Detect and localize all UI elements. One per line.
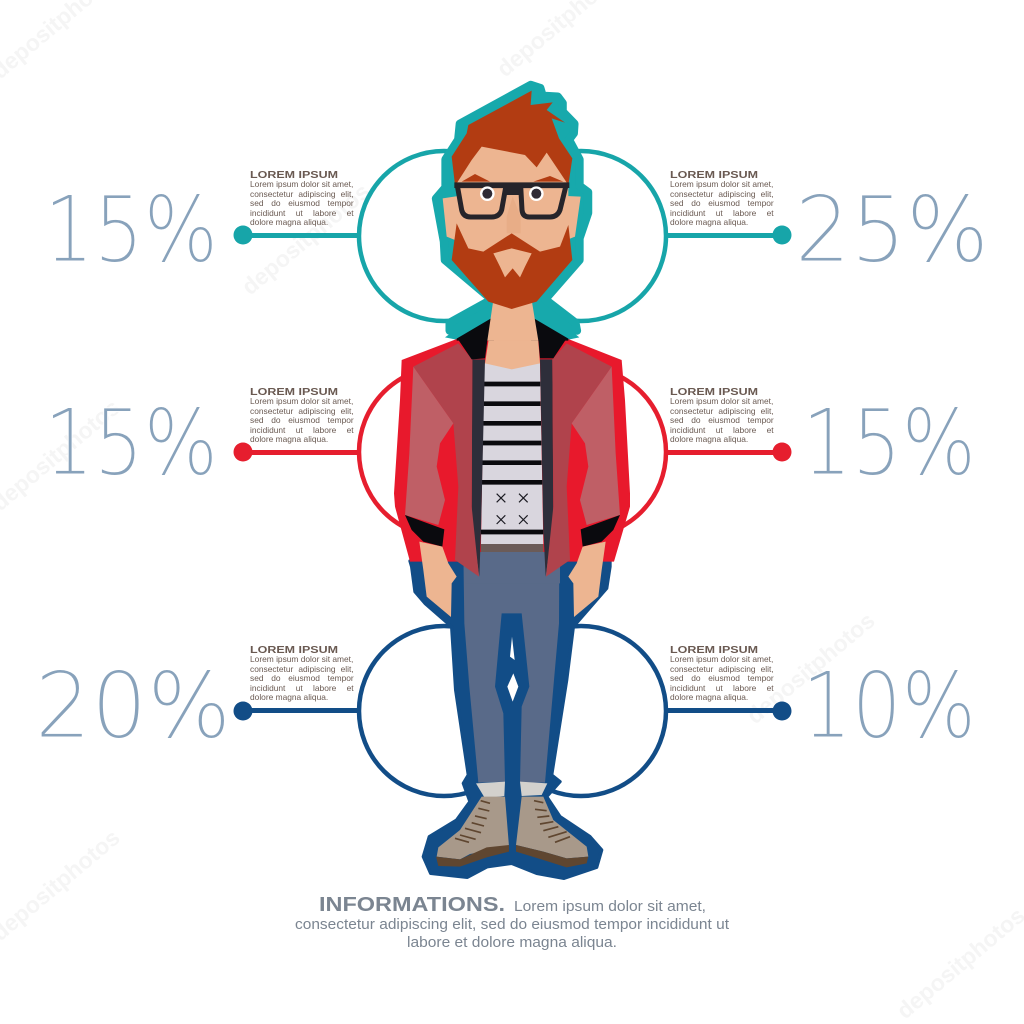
bottom information text: Lorem ipsum dolor sit amet,	[514, 899, 706, 915]
text block: bottom right: incididunt ut labore et	[670, 683, 774, 693]
text block: top right: dolore magna aliqua.	[670, 217, 748, 227]
connector: middle right	[666, 442, 792, 462]
percentage: 25% top right: 25%	[795, 178, 989, 283]
text block: top right: incididunt ut labore et	[670, 208, 774, 218]
text block: bottom left: sed do eiusmod tempor	[250, 673, 354, 683]
text block: top left	[250, 170, 354, 227]
text block: bottom right: dolore magna aliqua.	[670, 692, 748, 702]
text block: middle left: dolore magna aliqua.	[250, 434, 328, 444]
connector: bottom left	[234, 702, 359, 720]
text block: top left: consectetur adipiscing elit,	[250, 189, 354, 199]
percentage: 15% top left: 15%	[44, 178, 218, 283]
text block: middle right: incididunt ut labore et	[670, 425, 774, 435]
text block: middle left: LOREM IPSUM	[250, 387, 338, 398]
text block: middle right: sed do eiusmod tempor	[670, 415, 774, 425]
text block: bottom left: dolore magna aliqua.	[250, 692, 328, 702]
percentage: 15% middle left: 15%	[44, 391, 218, 496]
text block: middle right	[670, 387, 774, 444]
text block: middle right: consectetur adipiscing elit,	[670, 406, 774, 416]
text block: bottom left: LOREM IPSUM	[250, 645, 338, 656]
text block: top right	[670, 170, 774, 227]
text block: top left: sed do eiusmod tempor	[250, 198, 354, 208]
connector: top left	[234, 226, 359, 244]
text block: top left: Lorem ipsum dolor sit amet,	[250, 179, 353, 189]
text: depositphotos	[742, 607, 880, 729]
legs: blue outline and trousers	[410, 550, 610, 878]
red ring pair	[359, 367, 666, 537]
text block: bottom left: Lorem ipsum dolor sit amet,	[250, 654, 353, 664]
connector: middle left	[234, 442, 359, 462]
character figure	[394, 85, 630, 878]
text block: middle left: Lorem ipsum dolor sit amet,	[250, 396, 353, 406]
text block: top left: incididunt ut labore et	[250, 208, 354, 218]
text block: bottom left: incididunt ut labore et	[250, 683, 354, 693]
percentage: 10% bottom right: 10%	[802, 654, 976, 759]
bottom information text: INFORMATIONS.	[319, 894, 505, 916]
blue ring pair	[359, 626, 666, 796]
text block: top right: consectetur adipiscing elit,	[670, 189, 774, 199]
text block: bottom right: LOREM IPSUM	[670, 645, 758, 656]
text block: top right: LOREM IPSUM	[670, 170, 758, 181]
text block: middle right: LOREM IPSUM	[670, 387, 758, 398]
text block: bottom right: consectetur adipiscing elit,	[670, 664, 774, 674]
text block: middle left: sed do eiusmod tempor	[250, 415, 354, 425]
text block: bottom left: consectetur adipiscing elit,	[250, 664, 354, 674]
text block: top left: dolore magna aliqua.	[250, 217, 328, 227]
percentage: 15% middle right: 15%	[802, 391, 976, 496]
jacket and shirt	[394, 320, 630, 617]
text block: bottom right	[670, 645, 774, 702]
bottom information text	[295, 894, 729, 951]
text block: middle right: Lorem ipsum dolor sit amet,	[670, 396, 773, 406]
percentage: 20% bottom left: 20%	[35, 654, 231, 759]
bottom information text: labore et dolore magna aliqua.	[407, 935, 617, 951]
text block: top right: sed do eiusmod tempor	[670, 198, 774, 208]
text block: top left: LOREM IPSUM	[250, 170, 338, 181]
text block: middle right: dolore magna aliqua.	[670, 434, 748, 444]
text block: bottom left	[250, 645, 354, 702]
text block: middle left: consectetur adipiscing elit,	[250, 406, 354, 416]
text: depositphotos	[237, 178, 375, 300]
text block: middle left	[250, 387, 354, 444]
bottom information text: consectetur adipiscing elit, sed do eiusmod tempor incididunt ut	[295, 917, 729, 933]
head	[436, 85, 588, 341]
text block: top right: Lorem ipsum dolor sit amet,	[670, 179, 773, 189]
text block: bottom right: sed do eiusmod tempor	[670, 673, 774, 683]
teal ring pair	[359, 151, 666, 321]
text block: middle left: incididunt ut labore et	[250, 425, 354, 435]
text block: bottom right: Lorem ipsum dolor sit amet,	[670, 654, 773, 664]
connector: bottom right	[666, 702, 792, 720]
connector: top right	[666, 226, 792, 244]
